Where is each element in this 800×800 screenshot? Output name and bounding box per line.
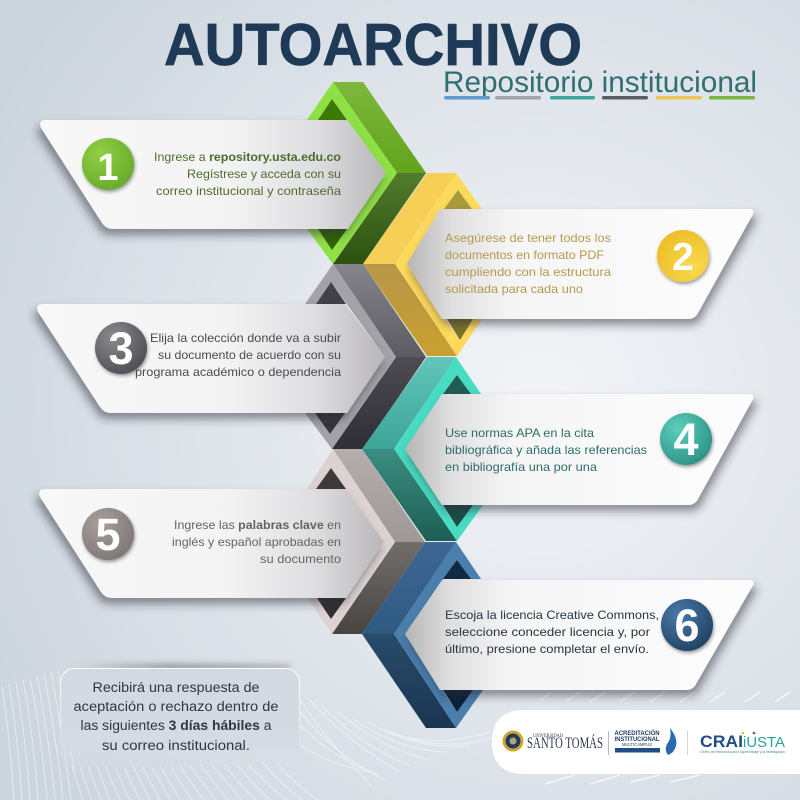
callout: response time: aceptación o rechazo dentro de [74,699,278,714]
step 5 text: su documento [260,552,341,566]
callout: response time [60,663,300,768]
number badge 6 [661,599,713,651]
step 2 text: documentos en formato PDF [445,248,604,262]
step 6 text [445,608,659,656]
logo: Santo Tomás wordmark [527,733,603,752]
number badge 1 [82,138,134,190]
chevron: teal [362,357,483,541]
callout: response time: las siguientes 3 días hábiles a [80,718,272,733]
logo: CRAI USTA: iUSTA [743,734,785,751]
number badge 2 [657,230,709,282]
panel: step 3 [37,304,385,413]
logo: institutional accreditation: INSTITUCIONAL [614,736,660,743]
panel: step 5 [39,489,384,598]
step 5 text [172,518,341,566]
step 1 text: Regístrese y acceda con su [187,167,341,181]
number badge 4: 4 [673,414,699,465]
chevron: yellow [363,173,482,356]
callout: response time: su correo institucional. [102,738,250,753]
callout: response time: Recibirá una respuesta de [92,680,260,695]
decorative wave lines [2,670,790,800]
step 2 text: solicitada para cada uno [445,282,583,296]
step 6 text: Escoja la licencia Creative Commons, [445,608,659,622]
chevron: blue [362,542,483,728]
step 1 text: correo institucional y contraseña [156,184,341,198]
panel: step 1 [40,120,386,229]
logo: institutional accreditation: ACREDITACIÓN [614,729,660,737]
logo: CRAI USTA: CRAI [700,733,743,751]
number badge 5 [82,508,134,560]
step 2 text: Asegúrese de tener todos los [445,231,611,245]
number badge 5: 5 [95,509,121,560]
panel: step 2 [407,209,753,319]
logo: institutional accreditation [614,728,676,755]
logo: Santo Tomás seal [502,730,524,752]
chevron: gray [305,264,426,449]
step 1 text: Ingrese a repository.usta.edu.co [154,150,341,164]
step 5 text: Ingrese las palabras clave en [174,518,341,532]
step 6 text: último, presione completar el envío. [445,642,649,656]
logo: CRAI USTA [700,732,785,754]
number badge 3 [95,322,147,374]
step 1 text [154,150,341,198]
logo: Santo Tomás wordmark: UNIVERSIDAD [533,734,563,739]
logo strip [492,710,800,774]
step 6 text: seleccione conceder licencia y, por [445,625,650,639]
step 2 text [445,231,611,296]
step 3 text: su documento de acuerdo con su [158,348,341,362]
number badge 6: 6 [674,600,700,651]
step 3 text [135,331,341,379]
step 3 text: Elija la colección donde va a subir [150,331,341,345]
step 4 text: bibliográfica y añada las referencias [445,443,647,457]
chevron: green [307,82,426,264]
logo: CRAI USTA: Centro de Recursos para el Aprendizaje y la Investigación [700,750,785,754]
subtitle with colour bars: Repositorio institucional [443,66,757,99]
step 4 text [445,426,647,474]
step 4 text: en bibliografía una por una [445,460,597,474]
number badge 3: 3 [108,323,134,374]
number badge 4 [660,413,712,465]
logo: Santo Tomás wordmark: SANTO TOMÁS [527,733,603,752]
step 5 text: inglés y español aprobadas en [172,535,341,549]
panel: step 6 [405,580,753,690]
step 4 text: Use normas APA en la cita [445,426,594,440]
number badge 1: 1 [97,147,119,189]
title: AUTOARCHIVO [164,12,582,78]
logo: institutional accreditation: MULTICAMPUS [622,742,652,747]
number badge 2: 2 [672,236,694,279]
chevron: taupe [307,449,425,634]
step 3 text: programa académico o dependencia [135,365,341,379]
panel: step 4 [405,394,753,505]
step 2 text: cumpliendo con la estructura [445,265,611,279]
